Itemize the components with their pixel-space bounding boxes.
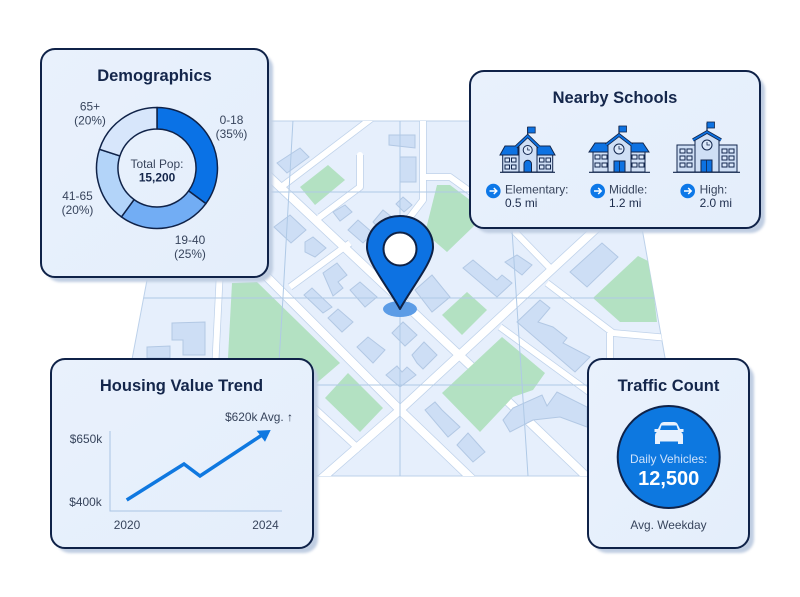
chart callout: $620k Avg. ↑ — [225, 410, 293, 424]
x axis labels — [114, 518, 279, 532]
elementary distance: 0.5 mi — [505, 196, 537, 210]
donut centre total: 15,200 — [139, 170, 176, 184]
x axis labels: 2020 — [114, 518, 141, 532]
label 41-65: 41-65 — [62, 189, 93, 203]
label 65+: (20%) — [74, 114, 106, 128]
panel: traffic count — [588, 359, 754, 553]
location pin — [367, 216, 433, 317]
average weekday note: Avg. Weekday — [630, 518, 707, 532]
panel: nearby schools — [470, 71, 765, 233]
demographics heading: Demographics — [97, 67, 212, 85]
high distance: 2.0 mi — [700, 196, 732, 210]
panel: housing value trend — [51, 359, 318, 553]
middle distance — [590, 182, 647, 210]
high distance: High: — [700, 182, 727, 196]
donut centre total — [131, 157, 183, 184]
vehicle count: 12,500 — [638, 468, 699, 490]
traffic circle — [618, 406, 720, 508]
icon: middle school — [589, 126, 650, 172]
label 65+: 65+ — [80, 100, 100, 114]
daily vehicles: Daily Vehicles: — [630, 452, 707, 466]
label 19-40: (25%) — [174, 247, 206, 261]
x axis labels: 2024 — [252, 518, 279, 532]
schools heading: Nearby Schools — [553, 89, 677, 107]
donut chart — [97, 108, 217, 228]
elementary distance: Elementary: — [505, 182, 568, 196]
map buildings — [147, 135, 618, 462]
label 41-65: (20%) — [62, 203, 93, 217]
middle distance: 1.2 mi — [609, 196, 641, 210]
line chart — [110, 430, 282, 511]
y axis labels: $400k — [69, 495, 102, 509]
elementary distance — [486, 182, 568, 210]
map — [110, 115, 686, 480]
map roads — [215, 115, 680, 480]
icon: high school — [673, 122, 740, 172]
y axis labels: $650k — [70, 432, 102, 446]
housing heading: Housing Value Trend — [100, 377, 263, 395]
label 0-18: 0-18 — [220, 113, 243, 127]
label 19-40: 19-40 — [175, 233, 205, 247]
middle distance: Middle: — [609, 182, 647, 196]
high distance — [680, 182, 732, 210]
y axis labels — [69, 432, 102, 509]
icon: elementary school — [500, 127, 555, 172]
icon: car — [654, 422, 684, 444]
map parks — [228, 165, 657, 432]
panel: demographics — [41, 49, 273, 282]
donut centre total: Total Pop: — [131, 157, 183, 171]
label 0-18: (35%) — [216, 127, 247, 141]
traffic heading: Traffic Count — [618, 377, 720, 395]
